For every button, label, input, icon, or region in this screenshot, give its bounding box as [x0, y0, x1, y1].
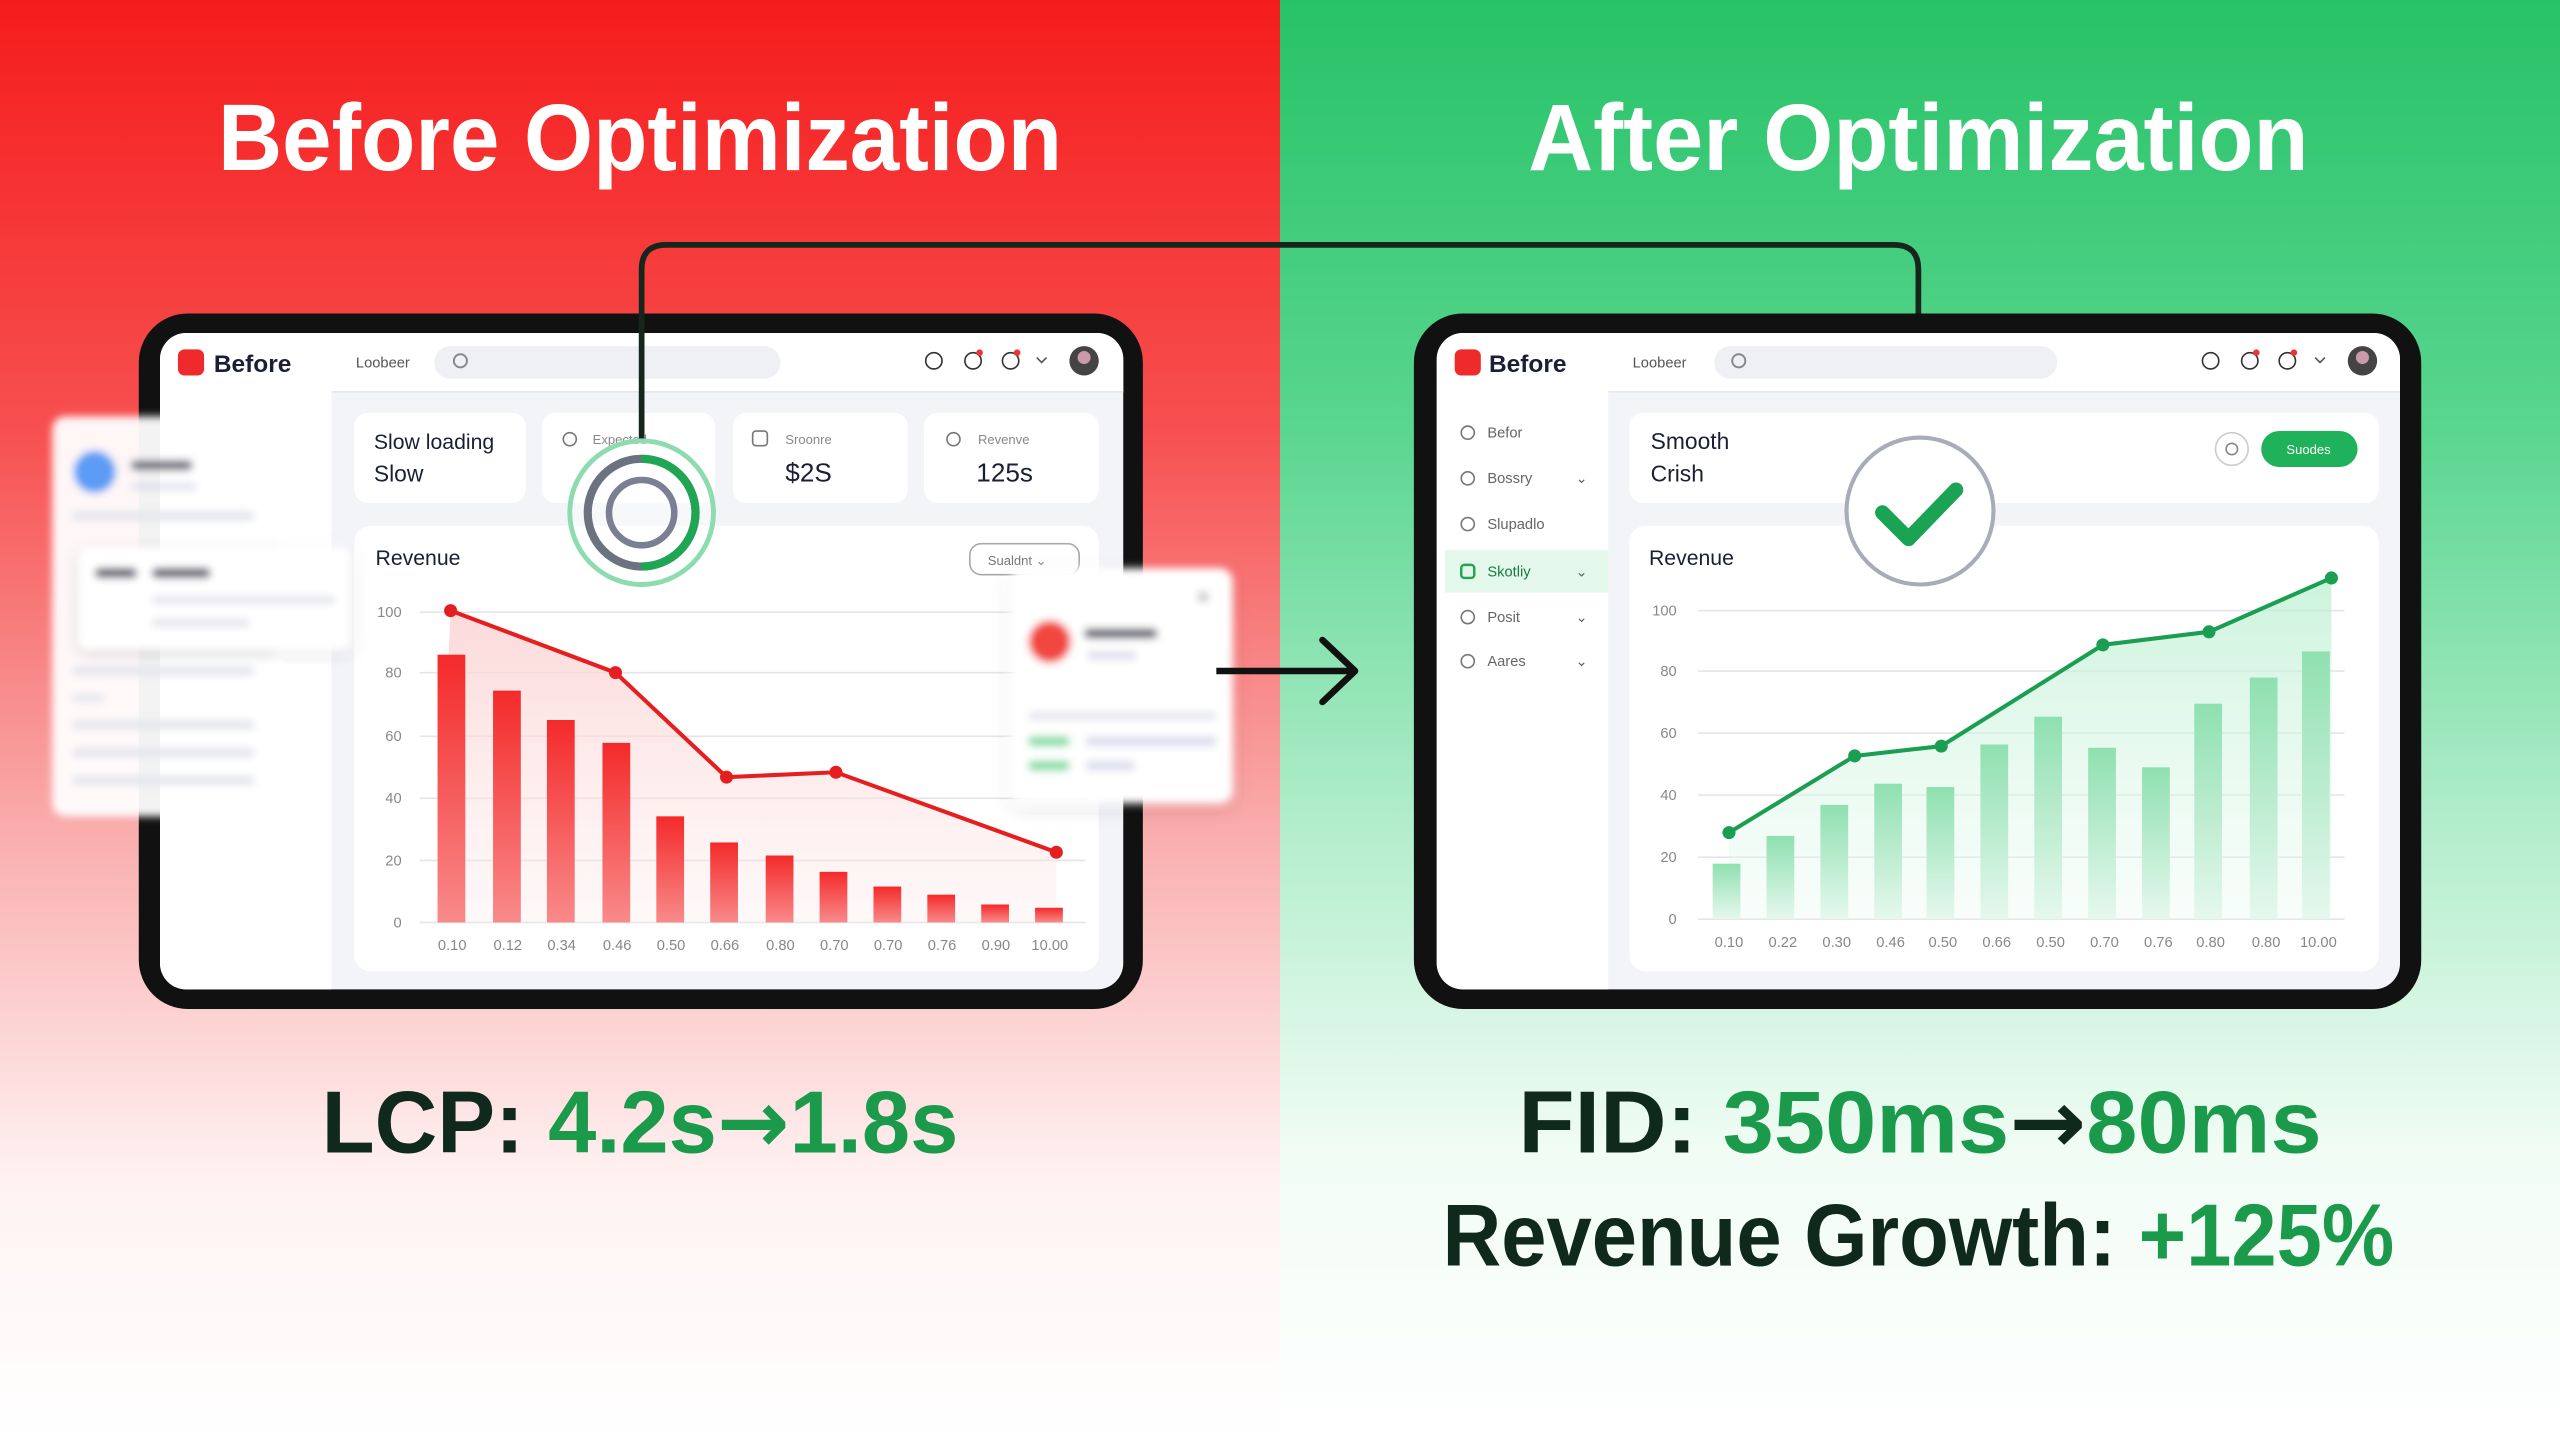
- panel: after tablet: [1414, 313, 2421, 1009]
- header: [1633, 346, 2377, 379]
- sidebar nav: Aares: [1487, 654, 1526, 670]
- chart: after revenue: 0.10: [1715, 935, 1743, 951]
- header: Loobeer: [356, 355, 410, 371]
- metric: revenue growth: Revenue Growth: +125%: [1442, 1185, 2394, 1284]
- chart: before revenue: 0.70: [874, 938, 902, 954]
- chart: after revenue: 0.76: [2144, 935, 2173, 951]
- title: after: After Optimization: [1528, 85, 2309, 191]
- background: left red: [0, 0, 1280, 1440]
- stat cards: $2S: [785, 458, 832, 488]
- chart: before revenue: 0.50: [657, 938, 685, 954]
- chart: after revenue: 0.70: [2090, 935, 2119, 951]
- card: smooth: [1629, 413, 2379, 503]
- chart: before revenue: 40: [385, 791, 402, 807]
- sidebar nav: Skotliy: [1487, 564, 1531, 580]
- blurred popup right: [1011, 568, 1233, 803]
- chart: after revenue: 0.80: [2252, 935, 2280, 951]
- metric: FID: FID: 350ms→80ms: [1518, 1071, 2322, 1174]
- chart: before revenue: 100: [377, 605, 402, 621]
- chart: before revenue: 0.12: [493, 938, 522, 954]
- chart: before revenue: 0.66: [711, 938, 739, 954]
- chart: before revenue: 0.46: [603, 938, 631, 954]
- sidebar nav: ⌄: [1576, 471, 1588, 487]
- sidebar nav: ⌄: [1576, 610, 1588, 626]
- chart: after revenue: 0.66: [1982, 935, 2011, 951]
- sidebar nav: ⌄: [1576, 564, 1588, 580]
- sidebar nav: Slupadlo: [1487, 517, 1545, 533]
- chart: after revenue: 60: [1660, 726, 1677, 742]
- chart: after revenue: 20: [1660, 850, 1677, 866]
- stat cards: Revenve: [978, 432, 1029, 447]
- chart: before revenue: Revenue: [376, 547, 460, 570]
- chart: before revenue: 0.76: [928, 938, 956, 954]
- chart: before revenue: 0.90: [982, 938, 1010, 954]
- chart: before revenue: 20: [385, 853, 402, 869]
- sidebar nav: Posit: [1487, 610, 1520, 626]
- chart: before revenue: 60: [385, 729, 402, 745]
- stat cards: Sroonre: [785, 432, 832, 447]
- card: smooth: Smooth: [1651, 428, 1729, 454]
- chart: before revenue: Sualdnt ⌄: [988, 553, 1047, 568]
- card: smooth: Suodes: [2286, 442, 2331, 457]
- chart: before revenue: 80: [385, 666, 402, 682]
- card: smooth: Crish: [1651, 461, 1704, 487]
- logo: [1455, 349, 1566, 378]
- chart: after revenue: Revenue: [1649, 547, 1734, 570]
- header: Loobeer: [1633, 355, 1687, 371]
- logo: Before: [1489, 351, 1566, 378]
- header: [356, 346, 1099, 379]
- stat cards: Slow: [374, 461, 424, 487]
- chart: after revenue: 0.50: [2036, 935, 2065, 951]
- chart: before revenue: 0.70: [820, 938, 849, 954]
- chart: before revenue: [354, 526, 1099, 971]
- chart: before revenue: 0.10: [438, 938, 467, 954]
- chart: before revenue: 0: [393, 915, 402, 931]
- chart: after revenue: 0: [1669, 912, 1677, 928]
- chart: after revenue: 0.30: [1822, 935, 1851, 951]
- blurred side panel left: [52, 416, 351, 816]
- arrow: [1216, 640, 1355, 702]
- blurred popup right: ✕: [1195, 587, 1212, 609]
- chart: after revenue: 0.46: [1876, 935, 1905, 951]
- chart: after revenue: 0.80: [2196, 935, 2225, 951]
- chart: after revenue: 0.22: [1769, 935, 1797, 951]
- logo: [178, 349, 291, 378]
- chart: after revenue: 0.50: [1929, 935, 1957, 951]
- chart: after revenue: 100: [1652, 604, 1677, 620]
- chart: after revenue: 80: [1660, 664, 1677, 680]
- logo: Before: [214, 351, 291, 378]
- chart: before revenue: 10.00: [1031, 938, 1068, 954]
- chart: before revenue: 0.34: [547, 938, 576, 954]
- stat cards: Expected: [593, 432, 647, 447]
- connector line: [642, 245, 1918, 441]
- sidebar nav: ⌄: [1576, 654, 1588, 670]
- sidebar nav: Befor: [1487, 426, 1523, 442]
- icon: check circle: [1847, 438, 1993, 584]
- title: before: Before Optimization: [218, 85, 1062, 191]
- stat cards: [354, 413, 1099, 503]
- sidebar nav: [1445, 426, 1608, 670]
- sidebar nav: Bossry: [1487, 471, 1533, 487]
- chart: after revenue: 10.00: [2300, 935, 2337, 951]
- chart: after revenue: 40: [1660, 788, 1677, 804]
- stat cards: Slow loading: [374, 431, 494, 454]
- metric: LCP: LCP: 4.2s→1.8s: [322, 1071, 958, 1174]
- chart: after revenue: [1629, 526, 2379, 971]
- chart: before revenue: 0.80: [766, 938, 795, 954]
- panel: before tablet: [139, 313, 1143, 1009]
- icon: loading ring: [570, 441, 713, 584]
- background: right green: [1280, 0, 2560, 1440]
- stat cards: 125s: [976, 458, 1033, 488]
